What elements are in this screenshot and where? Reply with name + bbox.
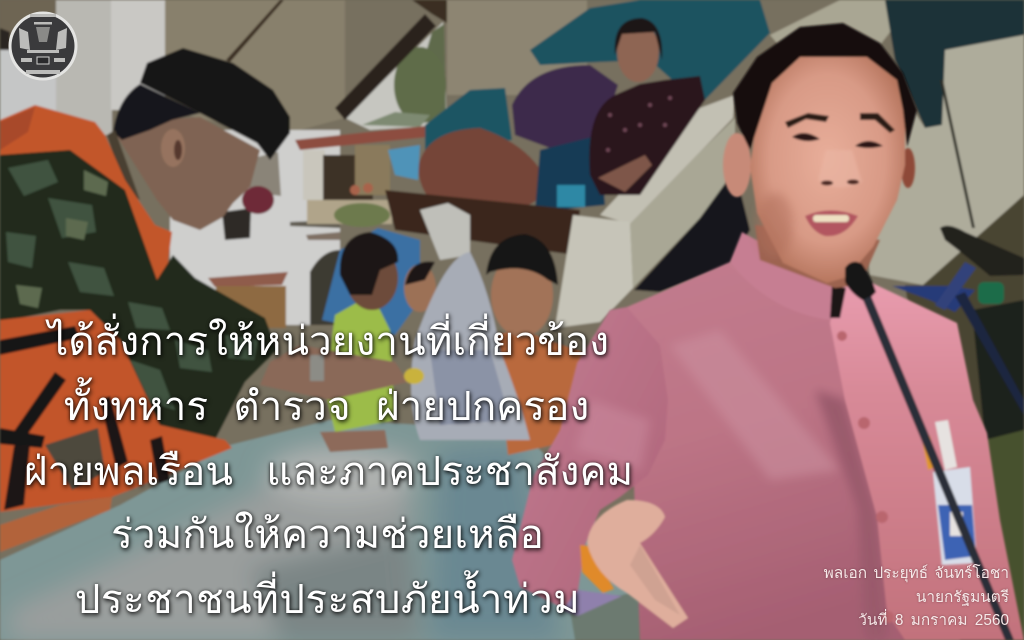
- left sleeve: [512, 307, 668, 615]
- headline line 4: ร่วมกันให้ความช่วยเหลือ: [111, 511, 544, 557]
- background: centre volunteers and plastic bags: [320, 228, 590, 455]
- nose: [818, 150, 862, 188]
- background: soldier in beret, life vest and camouflage: [0, 48, 424, 512]
- headline line 2: ทั้งทหาร ตำรวจ ฝ่ายปกครอง: [64, 377, 589, 429]
- hair: [733, 23, 917, 150]
- front placket shadow: [815, 390, 888, 640]
- background: bags of belongings: [385, 0, 770, 260]
- cuff lining: [562, 590, 622, 616]
- background: upper right wall and dark corner: [860, 0, 1024, 640]
- eyebrows: [785, 113, 895, 133]
- background: left building wall and columns: [0, 0, 345, 325]
- speaker title: นายกรัฐมนตรี: [916, 589, 1009, 606]
- headline line 5: ประชาชนที่ประสบภัยน้ำท่วม: [75, 570, 580, 622]
- background: bottom plastic sheeting and orange board: [0, 420, 640, 640]
- orange wristband: [580, 545, 614, 593]
- headline line 3: ฝ่ายพลเรือน และภาคประชาสังคม: [24, 448, 633, 494]
- jacket body: [627, 262, 1010, 640]
- background: dark roof beam, sky and palm tree: [295, 0, 587, 150]
- background: house with window, roof and hanging pot: [208, 145, 392, 328]
- neck: [755, 225, 880, 288]
- right ear: [901, 148, 915, 188]
- headline line 1: ได้สั่งการให้หน่วยงานที่เกี่ยวข้อง: [45, 313, 609, 364]
- background: white concrete staircase: [555, 0, 915, 328]
- microphone: [845, 262, 1014, 640]
- speaker name: พลเอก ประยุทธ์ จันทร์โอชา: [824, 564, 1009, 583]
- background: bicycle: [892, 226, 1024, 415]
- jacket buttons: [837, 331, 894, 623]
- eyes: [792, 133, 883, 148]
- left ear: [723, 133, 751, 197]
- right chest panel: [830, 282, 1024, 640]
- pink jacket: [512, 232, 1024, 640]
- Prime Minister figure: [512, 23, 1024, 640]
- cheek shading: [757, 193, 793, 257]
- face: [750, 57, 905, 283]
- date: วันที่ 8 มกราคม 2560: [858, 609, 1009, 629]
- name badge with clip and pin: [922, 420, 977, 565]
- credit: speaker name, title and date: [824, 564, 1009, 629]
- seal emblem: [19, 14, 67, 74]
- headline text: [24, 313, 633, 622]
- mandarin collar: [730, 232, 836, 320]
- right hand gesture: [587, 500, 688, 628]
- mouth: [805, 210, 858, 236]
- government seal: [8, 12, 78, 80]
- background: woman seated on stairs: [589, 18, 705, 195]
- background: camouflage pattern on sleeve: [6, 160, 258, 410]
